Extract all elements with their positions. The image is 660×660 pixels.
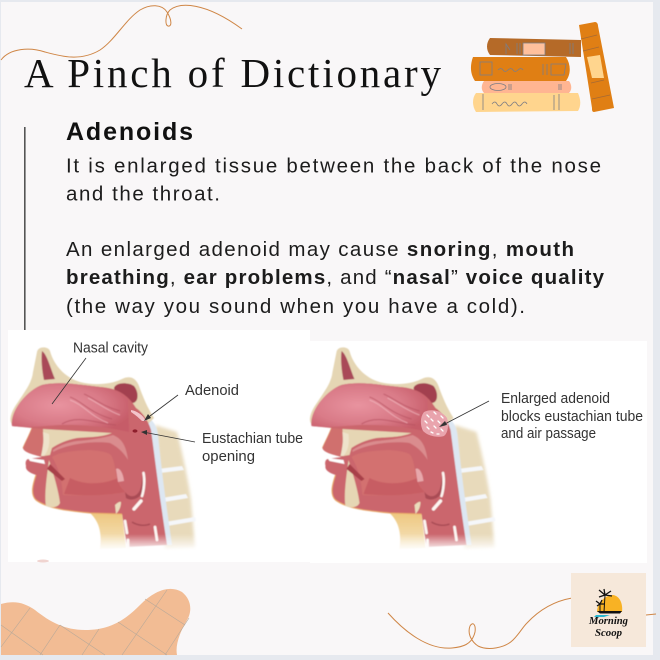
book: standing xyxy=(579,22,614,112)
paragraph 1: and the throat. xyxy=(66,182,220,206)
label: Enlarged adenoid blocks eustachian tube and air passage: blocks eustachian tube xyxy=(501,408,643,425)
panel: normal adenoid image xyxy=(8,330,310,562)
logo text xyxy=(588,616,628,639)
book: peach xyxy=(482,81,571,93)
label: Adenoid: Adenoid xyxy=(185,382,239,399)
label: Adenoid xyxy=(144,382,239,421)
icon: enlarged adenoid xyxy=(421,410,448,437)
heading: Adenoids: Adenoids xyxy=(66,118,193,146)
arrow: to enlarged adenoid xyxy=(439,401,489,427)
book: yellow xyxy=(473,93,580,112)
title: A Pinch of Dictionary xyxy=(24,50,442,96)
logo: Morning Scoop xyxy=(571,573,646,647)
label: Eustachian tube opening: Eustachian tube xyxy=(202,430,303,447)
small pink remnant xyxy=(37,560,49,562)
label: Enlarged adenoid blocks eustachian tube and air passage: and air passage xyxy=(501,425,596,442)
paragraph 1: It is enlarged tissue between the back of the nose xyxy=(66,154,601,178)
label: Enlarged adenoid blocks eustachian tube and air passage: Enlarged adenoid xyxy=(501,390,610,407)
text block: definition xyxy=(66,118,605,318)
icon: normal adenoid xyxy=(131,410,146,433)
label: Nasal cavity: Nasal cavity xyxy=(73,340,148,356)
logo text: Scoop xyxy=(595,628,622,639)
paragraph 2 xyxy=(66,238,605,318)
logo text: Morning xyxy=(588,616,628,627)
paragraph 2: (the way you sound when you have a cold). xyxy=(66,295,525,318)
label: Eustachian tube opening: opening xyxy=(202,448,255,465)
paragraph 2: breathing, ear problems, and “nasal” voice quality xyxy=(66,266,605,289)
divider bar xyxy=(24,127,26,330)
icon: sun and palm xyxy=(594,589,622,617)
label: Eustachian tube opening xyxy=(141,430,303,465)
icon: stack of books xyxy=(471,22,614,112)
label: Nasal cavity xyxy=(52,340,148,404)
decorative curve: top xyxy=(1,5,242,60)
paragraph 1 xyxy=(66,154,601,206)
book: orange xyxy=(471,57,570,81)
panel: enlarged adenoid image xyxy=(310,341,647,563)
paragraph 2: An enlarged adenoid may cause snoring, mouth xyxy=(66,238,574,261)
decorative blob: bottom left xyxy=(1,589,190,655)
label: Enlarged adenoid blocks eustachian tube and air passage xyxy=(501,390,643,442)
illustration: head cross-section xyxy=(310,347,504,560)
book: top brown xyxy=(487,38,581,57)
decorative curve: bottom xyxy=(388,598,572,648)
illustration: head cross-section xyxy=(10,347,205,560)
